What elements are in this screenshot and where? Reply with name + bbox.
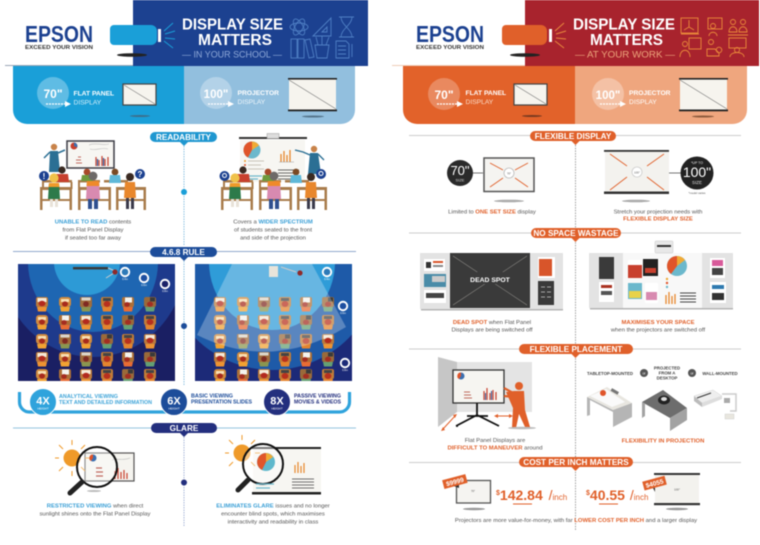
icons: workplace	[680, 18, 748, 57]
pill: readability	[150, 132, 217, 146]
flat panel size	[428, 78, 547, 117]
header: school	[5, 0, 368, 66]
price: projector cost per inch: $	[586, 490, 590, 497]
projector size	[200, 77, 337, 118]
heading: display size matters: DISPLAY SIZE	[182, 16, 283, 34]
heading: display size matters	[182, 16, 283, 60]
caption: unable to read: UNABLE TO READ contents	[55, 220, 131, 226]
labels: mounting options: TABLETOP-MOUNTED	[587, 371, 633, 376]
caption: restricted viewing: RESTRICTED VIEWING when direct	[47, 504, 144, 510]
logo: Epson: EPSON	[25, 21, 93, 47]
illustration: projector glare	[225, 435, 321, 494]
caption: dead spot: Displays are being switched off	[451, 328, 533, 334]
distance badges: 0.4m	[122, 278, 128, 281]
text: passive viewing	[294, 394, 341, 405]
text: analytical viewing: ANALYTICAL VIEWING	[59, 394, 118, 400]
icon: exclamation bubble: !	[43, 172, 45, 181]
caption: flexible display size: Stretch your projection needs with	[614, 210, 702, 216]
text: passive viewing: PASSIVE VIEWING	[294, 394, 341, 400]
caption: wider spectrum: Covers a WIDER SPECTRUM	[233, 220, 313, 226]
illustration: flexible projection: 100"	[634, 170, 640, 174]
flat panel size: DISPLAY	[466, 99, 494, 106]
labels: mounting options: FROM A	[659, 370, 675, 376]
illustration: moving a flat panel	[438, 357, 536, 431]
divider line: rule	[13, 250, 356, 252]
strip: viewing distances	[20, 388, 350, 416]
price: projector cost per inch: /inch	[630, 487, 648, 503]
dot: rule divider	[181, 261, 187, 385]
pill: 4.6.8 rule	[150, 247, 217, 261]
caption: flexibility in projection: FLEXIBILITY IN PROJECTION	[622, 438, 704, 444]
badge: 8X: HEIGHT	[271, 406, 283, 410]
illustration: flexible projection	[604, 150, 714, 202]
caption: eliminates glare	[216, 504, 330, 526]
labels: mounting options: or	[690, 372, 694, 376]
illustration: projector price: 100"	[674, 488, 680, 492]
badge: 70 inch: 70"	[450, 163, 470, 178]
caption: eliminates glare: ELIMINATES GLARE issues and no longer	[216, 504, 330, 510]
projector size: PROJECTOR	[238, 90, 279, 97]
caption: wider spectrum: of students seated to the front	[234, 228, 312, 234]
vertical divider: work	[574, 145, 576, 530]
comparison band: work	[403, 66, 747, 124]
text: basic viewing	[191, 394, 252, 405]
caption: difficult to maneuver: DIFFICULT TO MANEUVER around	[447, 446, 543, 452]
illustration: flat panel classroom	[39, 141, 146, 210]
text: basic viewing: BASIC VIEWING	[191, 394, 233, 400]
caption: restricted viewing: sunlight shines onto the Flat Panel Display	[39, 512, 151, 518]
room: projector 4.6.8 seating	[194, 263, 353, 382]
icon: projector	[110, 23, 175, 57]
projector size: DISPLAY	[238, 99, 266, 106]
projector size: PROJECTOR	[629, 90, 671, 97]
caption: unable to read: if seated too far away	[65, 236, 121, 242]
badge: 70 inch: SIZE	[456, 178, 465, 182]
heading: display size matters: MATTERS	[590, 32, 663, 49]
caption: unable to read: from Flat Panel Display	[63, 228, 123, 234]
distance badges: 0.6m	[340, 312, 346, 315]
flat panel size: FLAT PANEL	[466, 90, 506, 97]
projector mount	[269, 266, 303, 277]
price: flat panel cost per inch: $	[496, 490, 500, 497]
illustration: fixed size panel: 70"	[507, 172, 511, 176]
panel: in your school poster	[1, 0, 380, 527]
caption: maximises your space: MAXIMISES YOUR SPACE	[621, 320, 695, 326]
pill: no space wastage: NO SPACE WASTAGE	[533, 229, 619, 238]
pill: glare: GLARE	[170, 424, 199, 433]
badge: 4X: 4X	[36, 396, 50, 408]
price: flat panel cost per inch: 142.84	[500, 487, 543, 503]
vertical divider: glare	[181, 437, 187, 527]
logo: Epson: EXCEED YOUR VISION	[25, 45, 93, 51]
heading: display size matters: DISPLAY SIZE	[573, 16, 675, 34]
icons: school subjects	[290, 17, 354, 58]
badge: 6X	[160, 388, 188, 416]
projector size: 100"	[596, 90, 620, 102]
illustration: maximised space wall	[589, 241, 733, 310]
labels: mounting options: WALL-MOUNTED	[702, 371, 738, 376]
badge: 70 inch	[447, 160, 473, 186]
pill: readability: READABILITY	[156, 133, 212, 142]
flat panel mount	[73, 267, 118, 278]
labels: mounting options: or	[642, 372, 646, 376]
flat panel size: DISPLAY	[74, 100, 102, 106]
projector size	[592, 78, 728, 118]
price: projector cost per inch: 40.55	[590, 487, 625, 503]
pill: no space wastage	[531, 228, 621, 242]
illustration: wall mounted	[694, 390, 736, 419]
badge: 6X: HEIGHT	[168, 406, 180, 410]
illustration: projector price	[642, 473, 700, 510]
projector size: 100"	[204, 89, 228, 101]
flat panel size: 70"	[434, 88, 454, 102]
badge: 4X: HEIGHT	[37, 406, 49, 410]
pill: flexible display	[530, 131, 616, 145]
illustration: flat panel price	[442, 474, 490, 510]
icon: search bubble right	[316, 169, 326, 179]
pill: 4.6.8 rule: 4.6.8 RULE	[162, 248, 205, 257]
badge: up to 100 inch: 100"	[683, 164, 711, 180]
caption: difficult to maneuver: Flat Panel Displays are	[465, 438, 526, 444]
illustration: flexible projection: *model varies	[689, 191, 706, 195]
text: analytical viewing	[59, 394, 152, 406]
header: work	[392, 0, 759, 66]
icon: projector	[502, 23, 566, 57]
distance badges	[120, 267, 170, 293]
caption: flexible display size	[614, 210, 702, 222]
text: passive viewing: MOVIES & VIDEOS	[294, 399, 341, 405]
illustration: flat panel glare	[55, 440, 134, 493]
distance badges: 0.6m	[141, 284, 147, 287]
labels: mounting options: PROJECTED	[654, 366, 680, 370]
logo: Epson: EPSON	[416, 21, 484, 47]
caption: eliminates glare: encounter blind spots, which maximises	[221, 512, 325, 518]
illustration: fixed size panel	[447, 158, 534, 202]
badge: 6X: 6X	[167, 396, 181, 408]
badge: 8X: 8X	[270, 396, 284, 408]
price: flat panel cost per inch	[496, 487, 567, 504]
caption: maximises your space: when the projectors are switched off	[610, 328, 705, 334]
badge: 8X	[264, 388, 290, 416]
badge: up to 100 inch	[680, 156, 714, 190]
illustration: flat panel price: 70"	[471, 489, 475, 493]
room: flat panel 4.6.8 seating	[17, 263, 176, 382]
badge: 4X	[30, 388, 56, 416]
caption: one set size: Limited to ONE SET SIZE display	[448, 210, 536, 216]
pill: flexible display: FLEXIBLE DISPLAY	[535, 132, 612, 141]
badge: up to 100 inch: SIZE	[692, 180, 702, 185]
pill: cost per inch matters	[519, 457, 633, 471]
illustration: desktop projection	[642, 390, 687, 431]
heading: display size matters	[573, 16, 675, 60]
caption: lower cost per inch: Projectors are more value-for-money, with far LOWER COST PER INCH and a larger display	[455, 518, 697, 524]
price: projector cost per inch	[586, 487, 648, 504]
projector size: DISPLAY	[629, 99, 657, 106]
caption: eliminates glare: interactivity and readability in class	[228, 520, 318, 526]
labels: mounting options: DESKTOP	[657, 376, 677, 380]
flat panel size	[37, 77, 156, 117]
heading: display size matters: — AT YOUR WORK —	[575, 50, 675, 60]
pill: cost per inch matters: COST PER INCH MATTERS	[523, 458, 629, 467]
panel: at your work poster	[392, 0, 759, 530]
icon: question bubble: ?	[138, 170, 143, 179]
logo: Epson: EXCEED YOUR VISION	[416, 45, 484, 51]
caption: flexible display size: FLEXIBLE DISPLAY SIZE	[623, 216, 693, 222]
distance badges: 0.8m	[342, 369, 348, 372]
caption: restricted viewing	[39, 504, 151, 518]
heading: display size matters: — IN YOUR SCHOOL —	[182, 50, 282, 60]
caption: dead spot: DEAD SPOT when Flat Panel	[453, 320, 531, 326]
badge: up to 100 inch: *UP TO	[691, 161, 703, 165]
distance badges: 0.8m	[162, 290, 168, 293]
caption: dead spot	[451, 320, 533, 334]
caption: difficult to maneuver	[447, 438, 543, 452]
divider lines: work sections	[409, 136, 741, 462]
heading: display size matters: MATTERS	[198, 32, 272, 49]
pill: flexible placement: FLEXIBLE PLACEMENT	[530, 345, 622, 354]
price tag: $9999: $9999	[445, 477, 465, 488]
pill: flexible placement	[519, 344, 633, 358]
text: analytical viewing: TEXT AND DETAILED INFORMATION	[59, 400, 152, 406]
caption: maximises your space	[610, 320, 705, 334]
flat panel size: 70"	[43, 87, 63, 101]
illustration: dead spot wall: DEAD SPOT	[470, 277, 511, 284]
comparison band: school	[13, 66, 355, 124]
illustration: projector classroom	[220, 134, 327, 210]
pill: glare	[151, 423, 217, 437]
price tag: $4055: $4055	[645, 478, 665, 490]
vertical divider: readability	[181, 146, 187, 246]
flat panel size: FLAT PANEL	[74, 90, 114, 98]
price: flat panel cost per inch: /inch	[549, 487, 567, 503]
divider line: glare	[13, 427, 356, 429]
illustration: tabletop mounted	[587, 387, 632, 427]
distance badges	[322, 267, 350, 372]
illustration: dead spot wall	[420, 253, 563, 310]
text: basic viewing: PRESENTATION SLIDES	[191, 399, 252, 405]
caption: wider spectrum: and side of the projection	[240, 236, 306, 242]
caption: unable to read	[55, 220, 131, 242]
labels: mounting options	[587, 366, 738, 380]
icon: search bubble left	[220, 171, 230, 181]
distance badges: 0.4m	[324, 278, 330, 281]
caption: wider spectrum	[233, 220, 313, 242]
